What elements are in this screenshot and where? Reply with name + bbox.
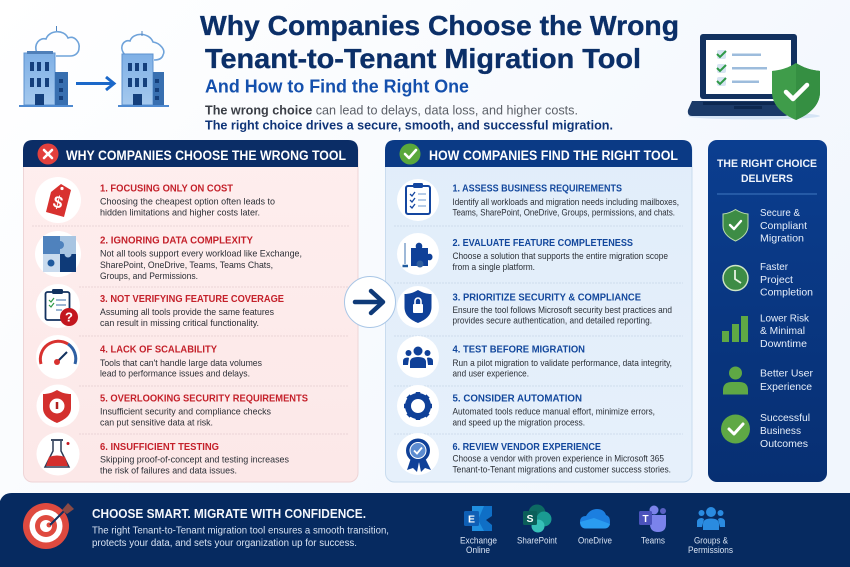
icon: target with dart xyxy=(23,503,74,549)
label: Lower Risk xyxy=(760,314,810,325)
description xyxy=(100,454,289,475)
description xyxy=(452,196,679,218)
description: lead to performance issues and delays. xyxy=(100,368,250,379)
footer description: protects your data, and sets your organization up for success. xyxy=(92,538,357,549)
label: Groups & xyxy=(694,536,728,546)
heading: 4. TEST BEFORE MIGRATION xyxy=(452,344,585,356)
benefit: successful outcomes xyxy=(721,413,810,450)
description xyxy=(452,357,672,379)
icon: shield with lock xyxy=(397,286,439,328)
benefit: faster completion xyxy=(723,262,813,299)
description: and speed up the migration process. xyxy=(452,416,585,427)
label: Faster xyxy=(760,262,789,273)
description: can put sensitive data at risk. xyxy=(100,416,213,427)
item 3: not verifying feature coverage xyxy=(36,284,284,328)
description: Automated tools reduce manual effort, minimize errors, xyxy=(452,406,655,417)
label: Successful xyxy=(760,413,810,424)
icon: groups xyxy=(697,507,725,530)
label xyxy=(760,413,810,450)
label: Better User xyxy=(760,369,814,380)
description: Ensure the tool follows Microsoft security best practices and xyxy=(452,304,672,315)
heading: 2. EVALUATE FEATURE COMPLETENESS xyxy=(452,237,633,249)
description: Choosing the cheapest option often leads to xyxy=(100,196,275,206)
arrow: wrong to right xyxy=(344,276,396,328)
description: Choose a vendor with proven experience in Microsoft 365 xyxy=(452,453,664,464)
icon: SharePoint: S xyxy=(526,513,534,525)
icon: laptop with checklist and shield xyxy=(688,34,820,120)
description xyxy=(100,357,262,379)
item 1: focusing only on cost xyxy=(35,177,275,223)
heading: 3. NOT VERIFYING FEATURE COVERAGE xyxy=(100,293,284,305)
description: Teams, SharePoint, OneDrive, Groups, permissions, and chats. xyxy=(452,207,675,218)
tagline: The right choice drives a secure, smooth, and successful migration. xyxy=(205,118,613,132)
heading: 6. REVIEW VENDOR EXPERIENCE xyxy=(452,441,601,453)
footer description: The right Tenant-to-Tenant migration tool ensures a smooth transition, xyxy=(92,526,389,537)
icon: Exchange: E xyxy=(468,514,475,526)
icon: speed gauge xyxy=(36,335,80,379)
icon: people xyxy=(397,336,439,378)
icon: red shield xyxy=(36,384,80,428)
title: Why Companies Choose the Wrong xyxy=(200,10,679,41)
label xyxy=(460,536,497,555)
label xyxy=(760,262,813,299)
heading: 1. ASSESS BUSINESS REQUIREMENTS xyxy=(452,183,622,195)
tagline xyxy=(205,102,613,132)
panel heading: THE RIGHT CHOICE xyxy=(717,158,817,170)
tagline: The wrong choice can lead to delays, data loss, and higher costs. xyxy=(205,102,578,118)
subtitle: And How to Find the Right One xyxy=(205,76,469,96)
title xyxy=(200,10,679,74)
description: the risk of failures and data issues. xyxy=(100,464,237,475)
description: Groups, and Permissions. xyxy=(100,270,198,281)
label: Business xyxy=(760,426,801,437)
description: Run a pilot migration to validate performance, data integrity, xyxy=(452,357,672,368)
icon: clock xyxy=(723,266,748,290)
label: Outcomes xyxy=(760,439,808,450)
benefit: secure and compliant xyxy=(723,208,807,245)
item 4: test before migration xyxy=(397,336,672,379)
heading: 4. LACK OF SCALABILITY xyxy=(100,344,217,356)
label: Project xyxy=(760,275,793,286)
item 6: insufficient testing xyxy=(36,432,289,476)
item 2: ignoring data complexity xyxy=(35,231,302,281)
icon: price tag xyxy=(35,177,81,223)
label: Experience xyxy=(760,382,812,393)
label: Teams xyxy=(641,536,666,546)
icon: gear xyxy=(397,385,439,427)
description: Tools that can't handle large data volumes xyxy=(100,357,262,368)
description: SharePoint, OneDrive, Teams, Teams Chats, xyxy=(100,259,273,270)
description: hidden limitations and higher costs later. xyxy=(100,207,260,218)
footer banner xyxy=(0,493,850,567)
icon: clipboard xyxy=(397,179,439,221)
heading: 2. IGNORING DATA COMPLEXITY xyxy=(100,235,253,247)
item 6: review vendor experience xyxy=(397,433,671,475)
benefit: lower risk xyxy=(722,314,810,350)
icon: tenant migration buildings and clouds xyxy=(19,26,169,107)
icon: puzzle xyxy=(35,231,81,277)
label: Migration xyxy=(760,234,804,245)
item 5: overlooking security requirements xyxy=(36,384,308,428)
description xyxy=(100,196,275,218)
item 2: evaluate feature completeness xyxy=(397,233,668,275)
panel heading: HOW COMPANIES FIND THE RIGHT TOOL xyxy=(429,148,678,163)
heading: 6. INSUFFICIENT TESTING xyxy=(100,441,219,453)
product: Exchange Online xyxy=(460,506,497,555)
label xyxy=(688,536,734,555)
description: from a single platform. xyxy=(452,261,535,272)
panel heading xyxy=(717,158,817,185)
icon: person xyxy=(723,366,748,394)
label: SharePoint xyxy=(517,536,558,546)
description: provides secure authentication, and detailed reporting. xyxy=(452,314,652,326)
label: Exchange xyxy=(460,536,497,546)
description xyxy=(100,248,302,281)
heading: 5. CONSIDER AUTOMATION xyxy=(452,393,582,405)
description xyxy=(452,406,655,427)
description: Tenant-to-Tenant migrations and customer success stories. xyxy=(452,463,671,474)
panel: how companies find the right tool xyxy=(385,140,692,482)
panel heading: WHY COMPANIES CHOOSE THE WRONG TOOL xyxy=(66,148,346,163)
label xyxy=(760,314,810,350)
benefit: better user experience xyxy=(723,366,814,394)
footer description xyxy=(92,526,389,549)
label: Permissions xyxy=(688,545,734,555)
heading: 5. OVERLOOKING SECURITY REQUIREMENTS xyxy=(100,393,308,405)
icon: OneDrive xyxy=(580,509,610,528)
title: Tenant-to-Tenant Migration Tool xyxy=(205,43,641,74)
icon: shield xyxy=(723,210,748,241)
product: SharePoint xyxy=(517,504,558,546)
description: can result in missing critical functionality. xyxy=(100,317,259,328)
icon: price tag: $ xyxy=(51,192,65,213)
description: Identify all workloads and migration needs including mailboxes, xyxy=(452,196,679,207)
item 3: prioritize security and compliance xyxy=(397,286,672,328)
description xyxy=(100,306,274,328)
label: & Minimal xyxy=(760,326,805,337)
product: Teams xyxy=(639,506,666,546)
description xyxy=(100,406,271,427)
description: Skipping proof-of-concept and testing increases xyxy=(100,454,289,465)
icon: bars xyxy=(722,316,748,342)
description xyxy=(452,453,671,474)
description: and user experience. xyxy=(452,368,529,379)
description: Insufficient security and compliance checks xyxy=(100,406,271,417)
item 5: consider automation xyxy=(397,385,655,427)
icon: check circle xyxy=(721,414,750,444)
icon: clipboard with question mark: ? xyxy=(65,310,73,324)
label xyxy=(760,369,814,393)
label: Online xyxy=(466,545,490,555)
icon: Teams: T xyxy=(642,514,649,525)
label xyxy=(760,208,807,245)
heading: 3. PRIORITIZE SECURITY & COMPLIANCE xyxy=(452,292,641,304)
icon: clipboard with question mark xyxy=(36,284,80,328)
label: OneDrive xyxy=(578,536,612,546)
item 1: assess business requirements xyxy=(397,179,679,221)
description xyxy=(452,304,672,326)
icon: green check xyxy=(400,144,420,164)
icon: puzzle piece and wrench xyxy=(397,233,439,275)
panel: why companies choose the wrong tool xyxy=(23,140,358,482)
product: OneDrive xyxy=(578,509,612,546)
panel: the right choice delivers xyxy=(708,140,827,482)
label: Compliant xyxy=(760,221,807,232)
label: Secure & xyxy=(760,208,800,219)
description: Not all tools support every workload like Exchange, xyxy=(100,248,302,259)
label: Downtime xyxy=(760,339,807,350)
item 4: lack of scalability xyxy=(36,335,262,379)
description: Choose a solution that supports the entire migration scope xyxy=(452,250,668,261)
panel heading: DELIVERS xyxy=(741,173,793,185)
icon: flask xyxy=(36,432,80,476)
description xyxy=(452,250,668,272)
label: Completion xyxy=(760,288,813,299)
icon: rosette xyxy=(397,433,439,475)
footer heading: CHOOSE SMART. MIGRATE WITH CONFIDENCE. xyxy=(92,507,366,521)
description: Assuming all tools provide the same features xyxy=(100,306,274,317)
product: Groups and Permissions xyxy=(688,507,734,555)
heading: 1. FOCUSING ONLY ON COST xyxy=(100,182,234,194)
icon: red cross xyxy=(38,144,58,164)
